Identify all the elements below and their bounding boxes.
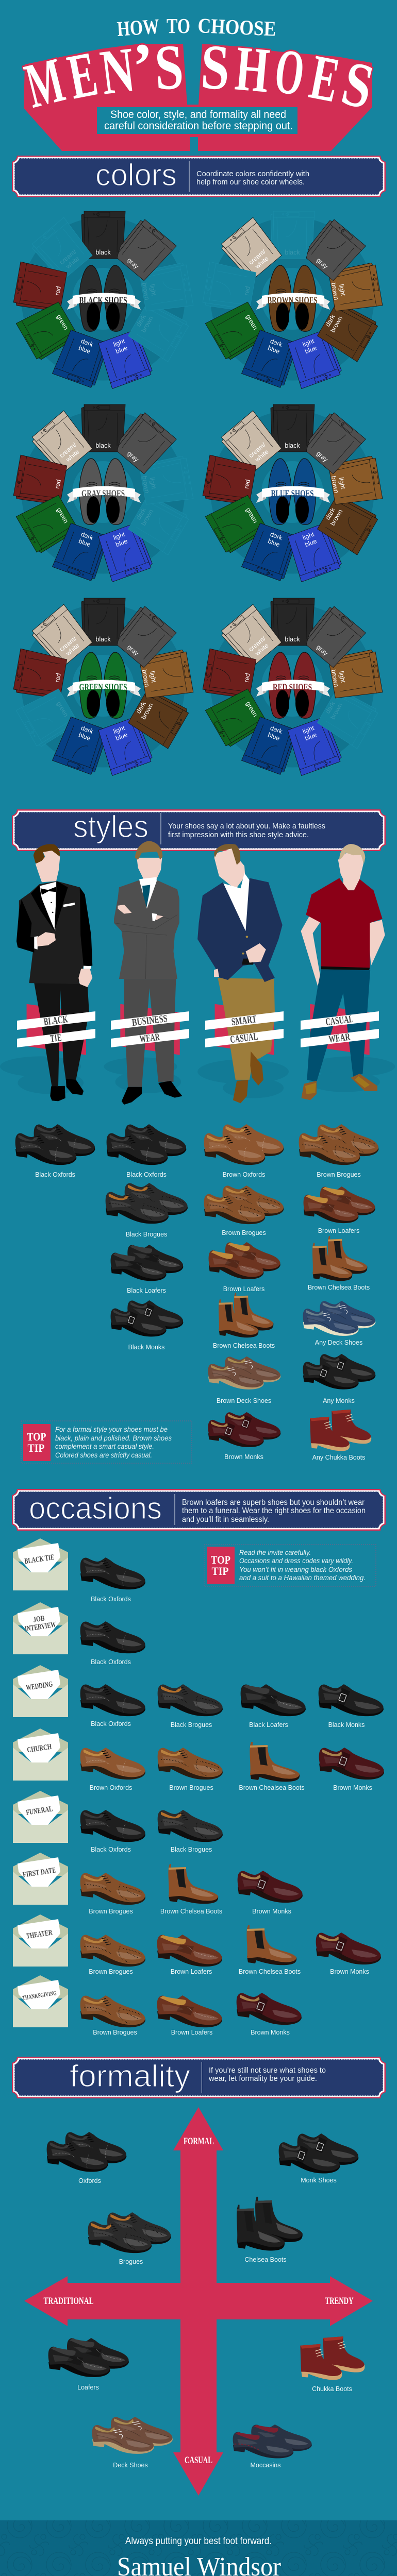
color wheel: brown shoes: blue bbox=[267, 344, 281, 355]
occasion: wedding: Black Brogues bbox=[171, 1721, 212, 1728]
color wheel: red shoes: blue bbox=[304, 731, 318, 742]
callout: top tip occasions: TOP bbox=[211, 1553, 230, 1566]
formality: chelsea boots: Chelsea Boots bbox=[244, 2256, 287, 2263]
column: casual wear bbox=[299, 1124, 378, 1461]
column: business wear: Black Brogues bbox=[126, 1231, 167, 1238]
color wheel: blue shoes: white bbox=[253, 448, 270, 464]
column: business wear: Black Oxfords bbox=[126, 1171, 167, 1178]
color wheel: blue shoes: light bbox=[302, 531, 316, 541]
formality: monk shoes: Monk Shoes bbox=[301, 2177, 337, 2184]
column: smart casual: Brown Loafers bbox=[223, 1285, 264, 1293]
color wheel: green shoes: black bbox=[95, 636, 111, 643]
color wheel: gray shoes: dark bbox=[80, 531, 94, 542]
formality: monk shoes bbox=[279, 2133, 358, 2184]
callout: top tip occasions: TIP bbox=[211, 1565, 229, 1578]
callout: top tip occasions: and a suit to a Hawaiian themed wedding. bbox=[239, 1573, 366, 1582]
column: casual wear: Brown Loafers bbox=[318, 1227, 359, 1234]
title kicker: CHOOSE bbox=[197, 13, 276, 41]
ribbon labels bbox=[17, 1011, 379, 1047]
figures: four men with shadows and ribbons bbox=[0, 841, 395, 1105]
occasion: black tie: Black Oxfords bbox=[91, 1596, 131, 1603]
color wheel: black shoes: blue bbox=[114, 344, 128, 355]
occasion: first date: Brown Chelsea Boots bbox=[160, 1908, 222, 1915]
occasion: funeral: Black Brogues bbox=[171, 1846, 212, 1853]
occasion: first date: Brown Monks bbox=[252, 1908, 291, 1915]
tagline bbox=[97, 107, 297, 134]
occasion: wedding: Black Oxfords bbox=[91, 1720, 131, 1727]
occasion: funeral bbox=[13, 1791, 223, 1853]
occasion: first date bbox=[13, 1853, 303, 1915]
color wheel: green shoes: red bbox=[54, 672, 62, 683]
column: business wear: Black Loafers bbox=[127, 1287, 166, 1294]
occasion: black tie: BLACK TIE bbox=[24, 1553, 55, 1566]
color wheel: gray shoes: blue bbox=[114, 537, 128, 548]
occasion: theater: Brown Chelsea Boots bbox=[239, 1968, 301, 1975]
occasion: funeral: Black Oxfords bbox=[91, 1846, 131, 1853]
ribbon labels: TIE bbox=[49, 1032, 62, 1044]
color wheel: red shoes: brown bbox=[329, 702, 344, 721]
section header: formality: formality bbox=[70, 2059, 190, 2093]
color wheel: black shoes: white bbox=[64, 255, 81, 270]
section header: formality bbox=[12, 2057, 386, 2098]
formality: oxfords: Oxfords bbox=[78, 2177, 101, 2184]
section header: occasions: them to a funeral. Wear the right shoes for the occasion bbox=[182, 1506, 366, 1515]
color wheel: blue shoes: dark bbox=[324, 506, 337, 521]
color wheel: black shoes: dark bbox=[135, 313, 147, 328]
ribbon labels: BUSINESS bbox=[131, 1013, 168, 1028]
formality axes arrows: CASUAL bbox=[185, 2455, 212, 2466]
color wheel: blue shoes: light bbox=[338, 477, 346, 490]
ribbon labels: CASUAL bbox=[229, 1031, 258, 1045]
color wheel: gray shoes: light bbox=[112, 531, 126, 541]
shoes by style bbox=[15, 1124, 378, 1461]
occasion: church bbox=[13, 1728, 384, 1791]
title banner shape bbox=[24, 44, 372, 151]
occasion: black tie bbox=[13, 1538, 145, 1603]
color wheel: green shoes bbox=[13, 598, 193, 775]
color wheel: red shoes: brown bbox=[330, 669, 340, 687]
color wheel: black shoes: black bbox=[95, 249, 111, 256]
color wheel: gray shoes: brown bbox=[140, 508, 155, 527]
color wheel: black shoes bbox=[13, 211, 193, 388]
occasion: church: Brown Brogues bbox=[169, 1784, 213, 1791]
color wheel: black shoes: blue bbox=[78, 344, 92, 355]
occasion: funeral: FUNERAL bbox=[26, 1805, 53, 1817]
man: smart casual bbox=[197, 844, 283, 1103]
color wheel: blue shoes: red bbox=[243, 479, 252, 489]
color wheel: gray shoes: dark bbox=[135, 506, 147, 521]
man: business wear bbox=[114, 841, 183, 1105]
color wheel: blue shoes: brown bbox=[329, 508, 344, 527]
headline: M bbox=[19, 45, 71, 122]
color wheel: brown shoes: gray bbox=[315, 257, 329, 270]
color wheel: brown shoes: white bbox=[253, 255, 270, 270]
color wheel: brown shoes: black bbox=[285, 249, 300, 256]
color wheel: red shoes: black bbox=[285, 636, 300, 643]
occasion: wedding: Black Loafers bbox=[249, 1721, 288, 1728]
occasion: thanksgiving: Brown Loafers bbox=[171, 2029, 212, 2036]
color wheel: green shoes: brown bbox=[141, 669, 151, 687]
section header: formality: If you’re still not sure what shoes to bbox=[209, 2066, 326, 2075]
color wheel: gray shoes: black bbox=[95, 442, 111, 449]
color wheel: gray shoes: light bbox=[148, 477, 157, 490]
color wheel: blue shoes: brown bbox=[330, 475, 340, 494]
occasion: job interview: JOB bbox=[32, 1615, 45, 1624]
man: black tie bbox=[16, 844, 92, 1101]
color wheel: green shoes: green bbox=[55, 700, 70, 718]
color wheel: blue shoes: gray bbox=[315, 450, 329, 464]
color wheel: black shoes: red bbox=[54, 285, 62, 296]
occasion: job interview: INTERVIEW bbox=[24, 1621, 57, 1633]
color wheel: gray shoes: blue bbox=[78, 537, 92, 548]
color wheel: red shoes: gray bbox=[315, 643, 329, 657]
color wheel: red shoes bbox=[202, 598, 383, 775]
section header: formality: wear, let formality be your guide. bbox=[208, 2074, 317, 2083]
formality: chukka boots: Chukka Boots bbox=[312, 2385, 352, 2393]
ribbon labels: BLACK bbox=[43, 1013, 69, 1028]
occasion: theater bbox=[13, 1914, 381, 1975]
headline bbox=[19, 30, 380, 123]
occasion: first date: FIRST DATE bbox=[22, 1866, 57, 1879]
formality: loafers: Loafers bbox=[77, 2384, 99, 2391]
section header: occasions: Brown loafers are superb shoes but you shouldn’t wear bbox=[182, 1498, 365, 1507]
ribbon labels: CASUAL bbox=[325, 1013, 354, 1028]
formality axes arrows: TRENDY bbox=[325, 2296, 354, 2307]
column: casual wear: Brown Brogues bbox=[317, 1171, 361, 1178]
section header: styles: Your shoes say a lot about you. Make a faultless bbox=[168, 822, 325, 831]
color wheel: black shoes: green bbox=[55, 313, 70, 331]
color wheel: gray shoes: brown bbox=[141, 475, 151, 494]
column: smart casual: Brown Chelsea Boots bbox=[213, 1342, 275, 1349]
section header: occasions: occasions bbox=[29, 1491, 162, 1526]
formality axes arrows bbox=[24, 2107, 373, 2496]
headline: O bbox=[271, 35, 309, 109]
ribbon labels: WEAR bbox=[139, 1031, 160, 1045]
color wheel: brown shoes: brown bbox=[329, 315, 344, 334]
color wheel: green shoes: dark bbox=[135, 700, 147, 715]
title kicker bbox=[116, 13, 276, 41]
color wheel: red shoes: red bbox=[243, 672, 252, 683]
footer: Always putting your best foot forward. bbox=[125, 2536, 272, 2547]
callout: top tip styles bbox=[21, 1421, 192, 1463]
callout: top tip occasions: Read the invite carefully. bbox=[239, 1548, 311, 1556]
formality: loafers bbox=[48, 2338, 129, 2391]
color wheel: brown shoes: BROWN SHOES bbox=[267, 295, 318, 306]
color wheel: brown shoes: dark bbox=[324, 313, 337, 328]
section header: styles bbox=[12, 809, 386, 851]
color wheel: blue shoes: cream/ bbox=[247, 441, 267, 459]
occasion: church: Brown Chealsea Boots bbox=[239, 1784, 305, 1791]
color wheel: green shoes: GREEN SHOES bbox=[79, 682, 127, 693]
column: business wear: Black Monks bbox=[128, 1344, 164, 1351]
column: smart casual: Brown Monks bbox=[224, 1453, 263, 1461]
color wheel: black shoes: light bbox=[112, 337, 126, 348]
column: casual wear: Any Deck Shoes bbox=[315, 1339, 362, 1346]
callout: top tip occasions: Occasions and dress codes vary wildly. bbox=[239, 1556, 353, 1565]
footer bbox=[0, 2520, 397, 2576]
section header: colors: help from our shoe color wheels. bbox=[196, 178, 305, 187]
title bbox=[19, 13, 380, 151]
color wheel: gray shoes: green bbox=[55, 506, 70, 524]
formality: deck shoes: Deck Shoes bbox=[113, 2462, 148, 2469]
color wheel: green shoes: white bbox=[64, 642, 81, 657]
formality: brogues: Brogues bbox=[119, 2258, 143, 2265]
section header: styles: first impression with this shoe style advice. bbox=[168, 831, 309, 839]
formality: deck shoes bbox=[92, 2417, 173, 2469]
ribbon labels: SMART bbox=[231, 1013, 257, 1028]
color wheel: blue shoes: BLUE SHOES bbox=[271, 488, 313, 499]
title kicker: TO bbox=[167, 14, 190, 38]
column: smart casual: Brown Deck Shoes bbox=[217, 1397, 271, 1404]
occasion: wedding: WEDDING bbox=[26, 1680, 54, 1692]
occasion: thanksgiving bbox=[13, 1975, 302, 2036]
column: smart casual: Brown Brogues bbox=[222, 1229, 266, 1236]
color wheel: black shoes: brown bbox=[141, 282, 151, 300]
color wheel: blue shoes: blue bbox=[304, 537, 318, 548]
color wheel: red shoes: light bbox=[338, 670, 346, 684]
callout: top tip styles: TOP bbox=[27, 1430, 46, 1443]
occasion: church: Brown Oxfords bbox=[90, 1784, 132, 1791]
color wheel: green shoes: light bbox=[112, 724, 126, 735]
color wheel: brown shoes: light bbox=[338, 283, 346, 297]
occasion: church: CHURCH bbox=[26, 1743, 53, 1755]
callout: top tip styles: For a formal style your shoes must be bbox=[55, 1425, 168, 1433]
color wheel: brown shoes: dark bbox=[269, 337, 284, 349]
color wheel: black shoes: dark bbox=[80, 337, 94, 349]
color wheel: gray shoes: GRAY SHOES bbox=[81, 488, 125, 499]
color wheel: blue shoes bbox=[202, 404, 383, 582]
column: business wear bbox=[106, 1124, 188, 1351]
color wheel: green shoes: light bbox=[148, 670, 157, 684]
occasion: theater: THEATER bbox=[26, 1928, 53, 1941]
man: casual wear bbox=[301, 844, 385, 1100]
formality: moccasins: Moccasins bbox=[250, 2462, 281, 2469]
color wheel: blue shoes: black bbox=[285, 442, 300, 449]
occasion: job interview: Black Oxfords bbox=[91, 1658, 131, 1666]
headline: S bbox=[200, 32, 230, 104]
headline: S bbox=[153, 31, 185, 104]
color wheel: gray shoes bbox=[13, 404, 193, 582]
color wheel: black shoes: BLACK SHOES bbox=[79, 295, 127, 306]
color wheel: red shoes: blue bbox=[267, 731, 281, 742]
color wheel: blue shoes: blue bbox=[267, 537, 281, 548]
tagline: careful consideration before stepping out. bbox=[104, 120, 293, 132]
occasion: church: Brown Monks bbox=[333, 1784, 372, 1791]
occasion: thanksgiving: Brown Monks bbox=[251, 2029, 290, 2036]
color wheel: green shoes: gray bbox=[126, 643, 140, 657]
occasion: thanksgiving: THANKSGIVING bbox=[22, 1989, 57, 2002]
occasion: thanksgiving: Brown Brogues bbox=[93, 2029, 137, 2036]
color wheel: red shoes: light bbox=[302, 724, 316, 735]
headline: S bbox=[336, 47, 380, 123]
color wheel: gray shoes: red bbox=[54, 479, 62, 489]
headline: H bbox=[233, 32, 272, 106]
color wheel: brown shoes: brown bbox=[330, 282, 340, 300]
formality: chelsea boots bbox=[237, 2197, 303, 2263]
section header: colors bbox=[12, 156, 386, 197]
color wheel: red shoes: RED SHOES bbox=[273, 682, 312, 693]
ribbon labels: WEAR bbox=[328, 1031, 351, 1045]
column: casual wear: Any Chukka Boots bbox=[312, 1454, 365, 1461]
floor shadows and red ribbon backs bbox=[0, 1004, 395, 1098]
column: casual wear: Any Monks bbox=[323, 1397, 355, 1404]
color wheel: black shoes: cream/ bbox=[58, 248, 78, 266]
color wheel: green shoes: brown bbox=[140, 702, 155, 721]
headline: E bbox=[62, 38, 103, 113]
color wheel: blue shoes: dark bbox=[269, 531, 284, 542]
section header: colors: colors bbox=[95, 158, 177, 192]
occasion: wedding bbox=[13, 1665, 384, 1728]
color wheel: black shoes: gray bbox=[126, 257, 140, 270]
formality axes arrows: TRADITIONAL bbox=[43, 2296, 94, 2307]
color wheel: red shoes: cream/ bbox=[247, 635, 267, 653]
callout: top tip styles: black, plain and polished. Brown shoes bbox=[55, 1434, 172, 1442]
column: black tie: Black Oxfords bbox=[35, 1171, 75, 1178]
callout: top tip styles: TIP bbox=[28, 1442, 44, 1454]
headline: ’ bbox=[130, 30, 156, 101]
color wheel: green shoes: blue bbox=[114, 731, 128, 742]
color wheel: gray shoes: gray bbox=[126, 450, 140, 464]
color wheel: gray shoes: cream/ bbox=[58, 441, 78, 459]
column: black tie bbox=[15, 1124, 95, 1178]
column: casual wear: Brown Chelsea Boots bbox=[308, 1284, 370, 1291]
occasion: first date: Brown Brogues bbox=[89, 1908, 133, 1915]
color wheel: red shoes: dark bbox=[324, 700, 337, 715]
color wheel: brown shoes: light bbox=[302, 337, 316, 348]
color wheel: green shoes: blue bbox=[78, 731, 92, 742]
color wheel: red shoes: dark bbox=[269, 724, 284, 736]
color wheel: brown shoes: cream/ bbox=[247, 248, 267, 266]
occasion: theater: Brown Monks bbox=[330, 1968, 369, 1975]
callout: top tip styles: complement a smart casual style. bbox=[55, 1442, 154, 1450]
occasion: wedding: Black Monks bbox=[328, 1721, 365, 1728]
formality: moccasins bbox=[233, 2425, 312, 2469]
tagline: Shoe color, style, and formality all need bbox=[110, 109, 286, 121]
callout: top tip styles: Colored shoes are strictly casual. bbox=[55, 1451, 152, 1459]
formality: brogues bbox=[88, 2212, 171, 2265]
color wheel: red shoes: green bbox=[244, 700, 259, 718]
occasion: theater: Brown Brogues bbox=[89, 1968, 133, 1975]
section header: colors: Coordinate colors confidently with bbox=[196, 170, 309, 178]
formality: oxfords bbox=[47, 2132, 126, 2184]
color wheel: green shoes: dark bbox=[80, 724, 94, 736]
headline: N bbox=[97, 35, 138, 108]
color wheel: brown shoes: green bbox=[244, 313, 259, 331]
formality: chukka boots bbox=[300, 2336, 365, 2393]
section header: occasions: and you’ll fit in seamlessly. bbox=[182, 1515, 269, 1524]
title kicker: HOW bbox=[116, 14, 160, 41]
column: smart casual: Brown Oxfords bbox=[223, 1171, 265, 1178]
color wheel: brown shoes: blue bbox=[304, 344, 318, 355]
color wheel: green shoes: cream/ bbox=[58, 635, 78, 653]
column: smart casual bbox=[204, 1124, 284, 1461]
headline: E bbox=[305, 41, 345, 116]
callout: top tip occasions: You won’t fit in wearing black Oxfords bbox=[239, 1565, 352, 1573]
color wheel: gray shoes: white bbox=[64, 448, 81, 464]
occasion: job interview bbox=[13, 1602, 145, 1666]
color wheel: brown shoes bbox=[202, 211, 383, 388]
section header: styles: styles bbox=[73, 809, 148, 844]
callout: top tip occasions bbox=[204, 1545, 376, 1586]
section header: occasions bbox=[12, 1489, 386, 1531]
color wheel: red shoes: white bbox=[253, 642, 270, 657]
color wheel: blue shoes: green bbox=[244, 506, 259, 524]
color wheel: black shoes: brown bbox=[140, 315, 155, 334]
color wheel: black shoes: light bbox=[148, 283, 157, 297]
color wheel: brown shoes: red bbox=[243, 285, 252, 296]
formality axes arrows: FORMAL bbox=[184, 2136, 214, 2147]
occasion: theater: Brown Loafers bbox=[171, 1968, 212, 1975]
